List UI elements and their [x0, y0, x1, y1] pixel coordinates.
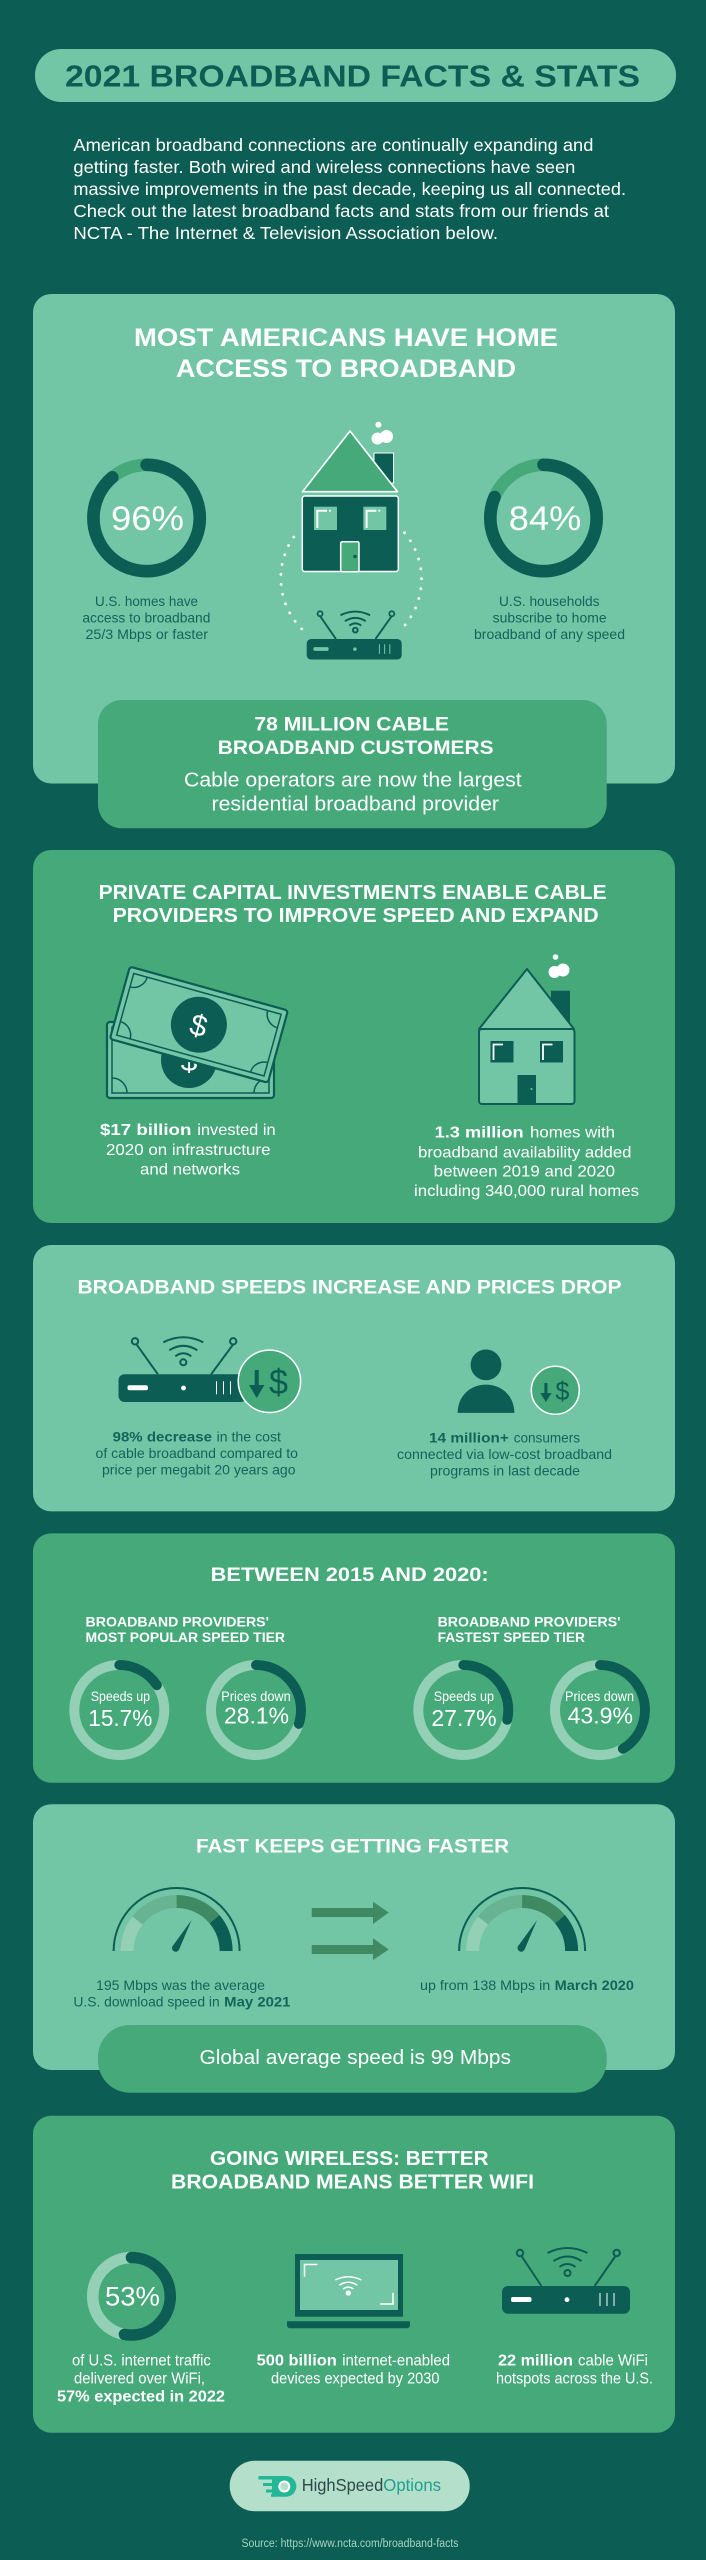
heading: PRIVATE CAPITAL INVESTMENTS ENABLE CABLE	[99, 882, 607, 904]
text: 98% decrease: 98% decrease	[113, 1428, 212, 1444]
icon: speedometer May 2021	[114, 1888, 240, 1952]
donut: speeds up 27.7%	[418, 1665, 508, 1755]
text: May 2021 speed	[73, 1977, 291, 2010]
title: 2021 BROADBAND FACTS & STATS	[65, 60, 640, 94]
text: $17 billion: $17 billion	[100, 1122, 191, 1139]
icon: person with price drop: $	[555, 1376, 570, 1406]
icon: house with router	[281, 422, 421, 660]
heading: MOST AMERICANS HAVE HOME	[134, 324, 558, 352]
heading: BROADBAND SPEEDS INCREASE AND PRICES DROP	[78, 1276, 622, 1298]
icon: dollar bills	[107, 967, 288, 1098]
text: 98% decrease: price per megabit 20 years ago	[102, 1462, 296, 1478]
heading	[99, 882, 607, 927]
icon: person with price drop	[458, 1350, 579, 1414]
panel: private investment	[33, 850, 675, 1223]
text: 96% label: 25/3 Mbps or faster	[86, 626, 208, 642]
donut: speeds up 15.7%: Speeds up	[91, 1688, 150, 1704]
text: 22 million	[496, 2353, 653, 2387]
text: $17 billion: invested in	[197, 1122, 276, 1139]
heading: PROVIDERS TO IMPROVE SPEED AND EXPAND	[113, 905, 599, 927]
icon: dollar bills: $	[186, 1008, 211, 1044]
donut: 84%	[490, 465, 597, 571]
icon: speedometer March 2020	[459, 1888, 585, 1952]
heading	[171, 2148, 534, 2194]
text: May 2021 speed: 195 Mbps was the average	[96, 1977, 265, 1993]
text: 96% label: U.S. homes have	[95, 593, 198, 609]
text: 1.3 million: 1.3 million	[435, 1125, 524, 1142]
icon: router with price drop: $	[269, 1363, 288, 1402]
text: May 2021 speed: May 2021	[224, 1994, 291, 2010]
text: March 2020 speed	[420, 1977, 634, 1993]
donut: prices down 43.9%: 43.9%	[568, 1702, 633, 1728]
intro text: American broadband connections are continually expanding and	[73, 135, 593, 155]
text: 500 billion: internet-enabled	[342, 2353, 450, 2370]
intro text: massive improvements in the past decade, keeping us all connected.	[73, 179, 626, 199]
subheading: fastest tier: FASTEST SPEED TIER	[438, 1630, 585, 1645]
donut: 53%	[93, 2258, 170, 2335]
intro text: getting faster. Both wired and wireless connections have seen	[73, 157, 575, 177]
donut: speeds up 15.7%: 15.7%	[88, 1705, 152, 1731]
text: $17 billion	[100, 1122, 276, 1178]
donut: 96%	[93, 465, 200, 571]
icon: dollar bills: $	[181, 1045, 198, 1078]
donut: speeds up 15.7%	[74, 1665, 164, 1755]
text: 53% label: 57% expected in 2022	[57, 2389, 225, 2406]
callout: 78 million: Cable operators are now the largest	[184, 770, 522, 792]
heading: ACCESS TO BROADBAND	[176, 355, 516, 383]
subheading: most popular tier: MOST POPULAR SPEED TIER	[86, 1630, 285, 1645]
heading: GOING WIRELESS: BETTER	[210, 2148, 489, 2170]
text: 53% label	[57, 2353, 225, 2406]
donut: 53%: 53%	[105, 2282, 160, 2312]
text: March 2020 speed: March 2020	[555, 1977, 634, 1993]
source: Source: https://www.ncta.com/broadband-facts	[242, 2538, 459, 2550]
donut: speeds up 27.7%: 27.7%	[431, 1705, 497, 1731]
arrows	[312, 1902, 389, 1960]
text: 22 million: 22 million	[498, 2353, 573, 2370]
text: 84% label: subscribe to home	[493, 610, 607, 626]
text: May 2021 speed: U.S. download speed in	[73, 1994, 220, 2010]
callout: 78 million: residential broadband provider	[212, 794, 499, 816]
text: 1.3 million: homes with	[530, 1125, 615, 1142]
text: 96% label	[82, 593, 210, 642]
logo: HighSpeedOptions: HighSpeed	[302, 2475, 383, 2495]
title	[35, 49, 676, 102]
callout: global average	[98, 2025, 607, 2093]
text: 14 million: connected via low-cost broadband	[397, 1446, 612, 1462]
heading	[134, 324, 558, 383]
text: 84% label: broadband of any speed	[474, 626, 625, 642]
text: 500 billion: 500 billion	[257, 2353, 337, 2370]
icon: laptop	[287, 2254, 410, 2328]
subheading: most popular tier	[86, 1614, 285, 1645]
text: 98% decrease: in the cost	[217, 1428, 281, 1444]
panel: fast keeps getting faster	[33, 1804, 675, 2093]
intro text: NCTA - The Internet & Television Association below.	[73, 223, 498, 243]
heading: FAST KEEPS GETTING FASTER	[196, 1835, 509, 1857]
donut: prices down 28.1%: 28.1%	[224, 1702, 289, 1728]
intro text: Check out the latest broadband facts and stats from our friends at	[73, 201, 609, 221]
heading: BETWEEN 2015 AND 2020:	[211, 1564, 489, 1586]
donut: speeds up 27.7%: Speeds up	[434, 1688, 494, 1704]
text: 98% decrease	[96, 1428, 298, 1478]
text: 14 million: programs in last decade	[430, 1462, 580, 1478]
text: 1.3 million: broadband availability added	[418, 1144, 632, 1161]
donut: prices down 43.9%	[555, 1665, 645, 1755]
logo: HighSpeedOptions	[230, 2461, 470, 2511]
text: $17 billion: and networks	[140, 1161, 240, 1178]
heading: BROADBAND MEANS BETTER WIFI	[171, 2172, 534, 2194]
text: 14 million	[397, 1430, 612, 1478]
callout: 78 million: BROADBAND CUSTOMERS	[218, 737, 494, 759]
callout: global average: Global average speed is 99 Mbps	[200, 2047, 511, 2069]
text: 22 million: hotspots across the U.S.	[496, 2370, 653, 2387]
text: 84% label	[474, 593, 625, 642]
subheading: most popular tier: BROADBAND PROVIDERS'	[86, 1614, 269, 1629]
text: 14 million: consumers	[514, 1430, 580, 1446]
text: 500 billion: devices expected by 2030	[271, 2370, 440, 2387]
logo: HighSpeedOptions: Options	[383, 2475, 441, 2495]
text: 1.3 million: including 340,000 rural homes	[414, 1183, 639, 1200]
text: 98% decrease: of cable broadband compared to	[96, 1445, 298, 1461]
text: 96% label: access to broadband	[82, 610, 210, 626]
text: March 2020 speed: up from 138 Mbps in	[420, 1977, 550, 1993]
intro text	[73, 135, 626, 243]
icon: router with price drop	[118, 1337, 301, 1413]
text: 500 billion	[257, 2353, 450, 2387]
donut: 84%: 84%	[509, 500, 581, 538]
panel: home access	[33, 294, 675, 828]
text: 84% label: U.S. households	[499, 593, 600, 609]
text: 53% label: delivered over WiFi,	[74, 2370, 205, 2387]
subheading: fastest tier: BROADBAND PROVIDERS'	[438, 1614, 620, 1629]
text: 14 million: 14 million+	[429, 1430, 509, 1446]
icon: house	[479, 954, 574, 1104]
text: 1.3 million: between 2019 and 2020	[434, 1164, 615, 1181]
text: 1.3 million	[414, 1125, 639, 1200]
callout: 78 million	[98, 700, 607, 828]
donut: prices down 28.1%	[211, 1665, 301, 1755]
icon: router	[502, 2248, 630, 2314]
text: $17 billion: 2020 on infrastructure	[106, 1142, 271, 1159]
donut: prices down 28.1%: Prices down	[221, 1688, 291, 1704]
donut: prices down 43.9%: Prices down	[565, 1688, 634, 1704]
panel: between 2015 and 2020	[33, 1533, 675, 1783]
panel: speeds and prices	[33, 1245, 675, 1511]
text: 22 million: cable WiFi	[578, 2353, 648, 2370]
panel: going wireless	[33, 2116, 675, 2433]
subheading: fastest tier	[438, 1614, 620, 1645]
donut: 96%: 96%	[111, 500, 184, 538]
text: 53% label: of U.S. internet traffic	[72, 2353, 211, 2370]
callout: 78 million: 78 MILLION CABLE	[254, 714, 449, 736]
